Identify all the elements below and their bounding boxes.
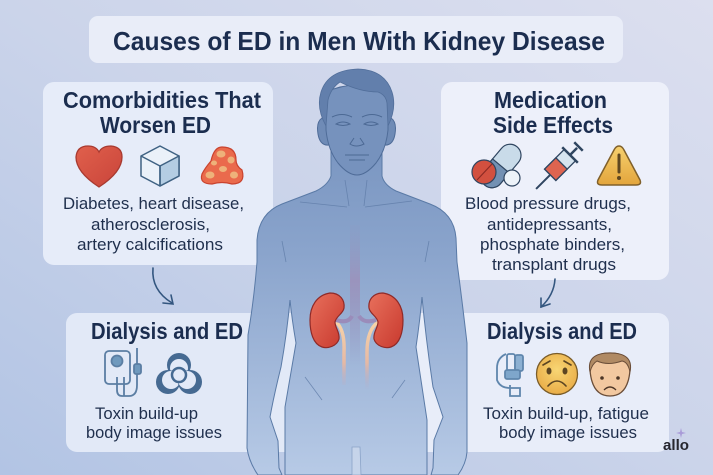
- heading: medication: [493, 87, 613, 138]
- renal vessels: [336, 316, 376, 321]
- text: medication: transplant drugs: [492, 256, 616, 274]
- text: comorbidities: [63, 195, 244, 254]
- title: [89, 16, 623, 63]
- heading: comorbidities: Comorbidities That: [63, 87, 261, 113]
- ureters: [336, 322, 378, 390]
- text: dialysis right: Toxin build-up, fatigue: [483, 405, 649, 423]
- right kidney: [369, 293, 403, 348]
- logo: [663, 428, 689, 454]
- panel: medication background: [441, 82, 669, 280]
- text: medication: [465, 195, 631, 274]
- text: medication: phosphate binders,: [480, 236, 625, 254]
- icon: heart: [76, 146, 122, 187]
- icon: biohazard: [156, 353, 202, 394]
- human figure: [247, 69, 467, 475]
- spine: [350, 225, 360, 365]
- heading: medication: Side Effects: [493, 112, 613, 138]
- panel: comorbidities background: [43, 82, 273, 265]
- text: comorbidities: Diabetes, heart disease,: [63, 195, 244, 213]
- text: comorbidities: artery calcifications: [77, 236, 223, 254]
- heading: dialysis left: Dialysis and ED: [91, 318, 243, 344]
- face: [326, 85, 388, 175]
- logo: allo: [663, 437, 689, 454]
- icon: plaque cell: [201, 147, 243, 184]
- text: medication: Blood pressure drugs,: [465, 195, 631, 213]
- icon: dialysis machine: [105, 348, 141, 396]
- text: dialysis left: body image issues: [86, 424, 222, 442]
- text: dialysis right: body image issues: [499, 424, 637, 442]
- ears: [318, 118, 396, 145]
- heading: comorbidities: [63, 87, 261, 138]
- heading: medication: Medication: [494, 87, 607, 113]
- text: comorbidities: atherosclerosis,: [91, 216, 210, 234]
- icon: sugar cube: [141, 146, 179, 186]
- hair: [319, 69, 394, 126]
- text: dialysis left: Toxin build-up: [95, 405, 198, 423]
- icon: pills: [472, 140, 525, 192]
- arrow: medication to dialysis: [541, 279, 555, 307]
- text: medication: antidepressants,: [487, 216, 612, 234]
- chest lines: [282, 180, 429, 400]
- icon: sad emoji: [536, 354, 578, 394]
- panel: dialysis right background: [405, 313, 669, 452]
- body silhouette: [247, 150, 467, 475]
- arrow: comorbidities to dialysis: [153, 268, 173, 304]
- leg gap: [352, 447, 361, 475]
- title: Causes of ED in Men With Kidney Disease: [113, 26, 605, 56]
- text: dialysis right: [483, 405, 649, 442]
- icon: syringe: [528, 139, 586, 197]
- heading: comorbidities: Worsen ED: [100, 112, 211, 138]
- icon: worried man face: [589, 353, 631, 396]
- icon: dialysis tube device: [497, 354, 523, 396]
- heading: dialysis right: Dialysis and ED: [487, 318, 637, 344]
- facial features: [332, 114, 382, 160]
- icon: warning triangle: [598, 146, 640, 185]
- text: dialysis left: [86, 405, 222, 442]
- left kidney: [310, 293, 344, 348]
- panel: dialysis left background: [66, 313, 306, 452]
